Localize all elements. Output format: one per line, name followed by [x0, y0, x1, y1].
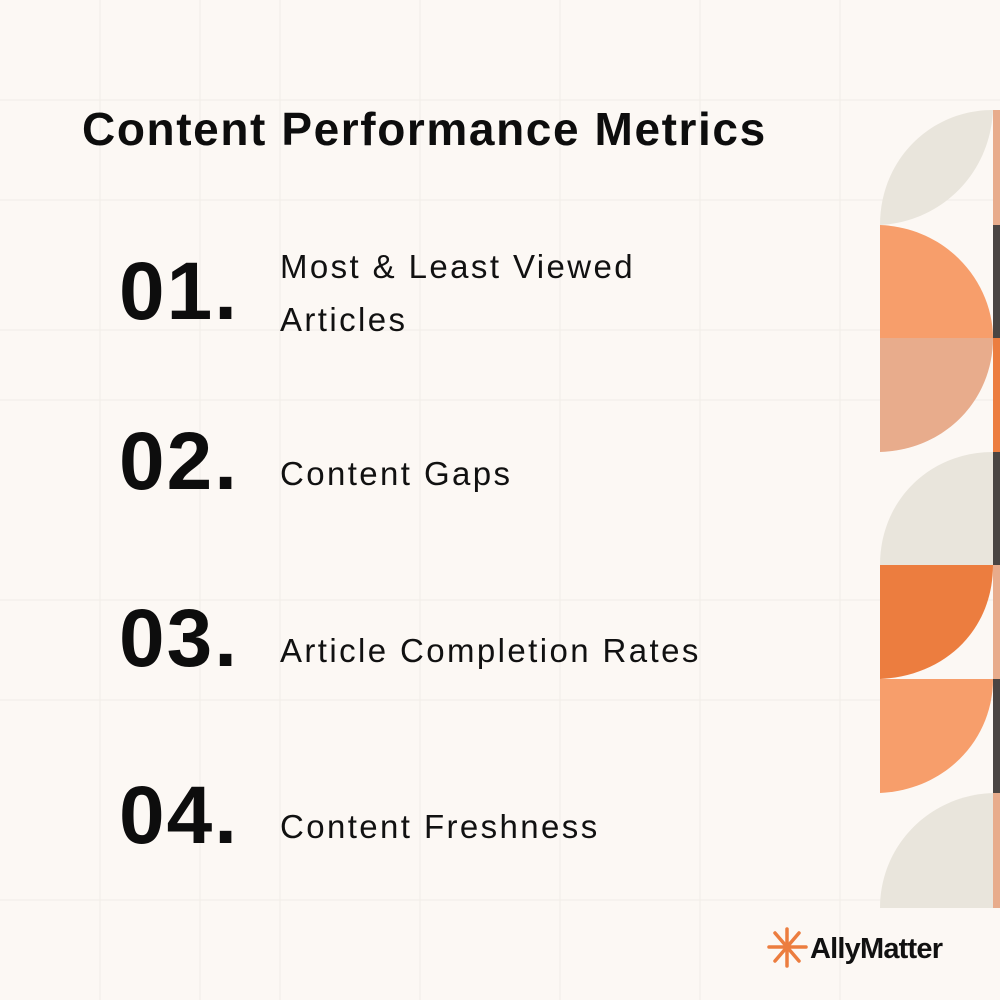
item 04	[119, 770, 600, 861]
item 01	[119, 246, 635, 338]
item 01: Most & Least Viewed	[280, 248, 635, 285]
item 01: 01.	[119, 246, 239, 337]
item 04: 04.	[119, 770, 239, 861]
logo: AllyMatter	[769, 929, 943, 966]
item 03: 03.	[119, 593, 239, 684]
item 04: Content Freshness	[280, 808, 600, 845]
title: Content Performance Metrics	[82, 103, 767, 155]
item 02: Content Gaps	[280, 455, 512, 492]
item 02: 02.	[119, 416, 239, 507]
logo: AllyMatter: AllyMatter	[810, 933, 943, 965]
item 01: Articles	[280, 301, 407, 338]
item 03	[119, 593, 701, 684]
item 02	[119, 416, 512, 507]
decorative shapes column	[880, 110, 1000, 908]
item 03: Article Completion Rates	[280, 632, 701, 669]
